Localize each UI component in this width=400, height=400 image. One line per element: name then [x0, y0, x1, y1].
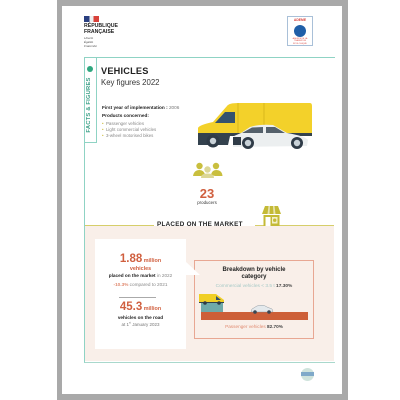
- logo tagline: AGENCE DE LA: [293, 38, 307, 40]
- icon: producers group: [193, 162, 222, 178]
- panel heading: [222, 266, 286, 280]
- tab: facts and figures: [84, 57, 97, 143]
- heading text: PLACED ON THE MARKET: [157, 221, 243, 228]
- logo: ADEME: [287, 16, 313, 46]
- car: [233, 125, 308, 149]
- bar: commercial share: [201, 303, 223, 313]
- logo wordmark: FRANÇAISE: [84, 29, 114, 35]
- panel: key figures card: [95, 239, 186, 349]
- pink section background: [85, 226, 334, 361]
- products list: • 3-wheel motorised bikes: [102, 133, 153, 138]
- label: commercial vehicles: Commercial vehicles < 3.5 t 17.30%: [216, 284, 292, 289]
- icon: green dot: [87, 66, 93, 72]
- icon: globe: [294, 25, 306, 37]
- motto: Fraternité: [84, 44, 97, 48]
- number: 23: [200, 186, 214, 201]
- bar: passenger share: [201, 312, 308, 320]
- icon: market stall: [262, 206, 281, 226]
- text: change: -10.3% compared to 2021: [114, 282, 167, 287]
- olive line left: [85, 225, 154, 226]
- panel: breakdown by vehicle category: [194, 260, 314, 339]
- text: placed on the market: placed on the market in 2022: [109, 273, 172, 278]
- logo wordmark: [84, 22, 118, 35]
- logo tagline: [292, 38, 308, 45]
- products list: • Light commercial vehicles: [102, 127, 156, 132]
- motto: [84, 36, 97, 48]
- motto: Égalité: [84, 40, 93, 44]
- section heading: placed on the market: [85, 206, 334, 228]
- text: date: at 1st January 2023: [122, 322, 160, 327]
- figure: 23 producers: [197, 186, 217, 205]
- products heading: Products concerned:: [102, 112, 149, 118]
- tab label: FACTS & FIGURES: [86, 77, 92, 133]
- logo tagline: ÉCOLOGIQUE: [293, 43, 307, 45]
- text: first year of implementation: First year of implementation : 2006: [102, 104, 179, 110]
- icon: small car: [250, 305, 274, 314]
- motto: Liberté: [84, 36, 93, 40]
- label: producers: [197, 200, 217, 205]
- icon: flag: [84, 16, 99, 22]
- label: passenger vehicles: Passenger vehicles 82.70%: [225, 324, 283, 328]
- van: [198, 103, 312, 148]
- subheading: Key figures 2022: [101, 78, 160, 87]
- page sheet with grey border: [57, 0, 348, 400]
- panel heading: category: [241, 274, 266, 280]
- badge band: [300, 372, 314, 376]
- panel frame: teal: [84, 57, 335, 363]
- illustration: yellow van and white car: [198, 103, 312, 149]
- panel heading: Breakdown by vehicle: [222, 266, 286, 272]
- label: vehicles: vehicles: [130, 266, 151, 272]
- icon: bottom-right badge: [300, 368, 314, 380]
- logo: République Française: [84, 16, 118, 48]
- figure: 45.3 million: 45.3 million: [120, 301, 161, 313]
- text: products concerned: [102, 112, 156, 138]
- olive line right: [255, 225, 334, 226]
- divider: [119, 297, 156, 298]
- logo name: ADEME: [294, 18, 306, 22]
- pointer from white card: [186, 262, 200, 275]
- heading: vehicles: VEHICLES: [101, 66, 149, 76]
- figure: 1.88 million: 1.88 million: [120, 253, 161, 265]
- products list: • Passenger vehicles: [102, 120, 144, 126]
- products list: [102, 120, 156, 138]
- icon: small van: [199, 294, 224, 305]
- logo tagline: TRANSITION: [294, 40, 306, 42]
- logo wordmark: RÉPUBLIQUE: [84, 23, 118, 29]
- text: vehicles on the road: vehicles on the road: [118, 315, 163, 320]
